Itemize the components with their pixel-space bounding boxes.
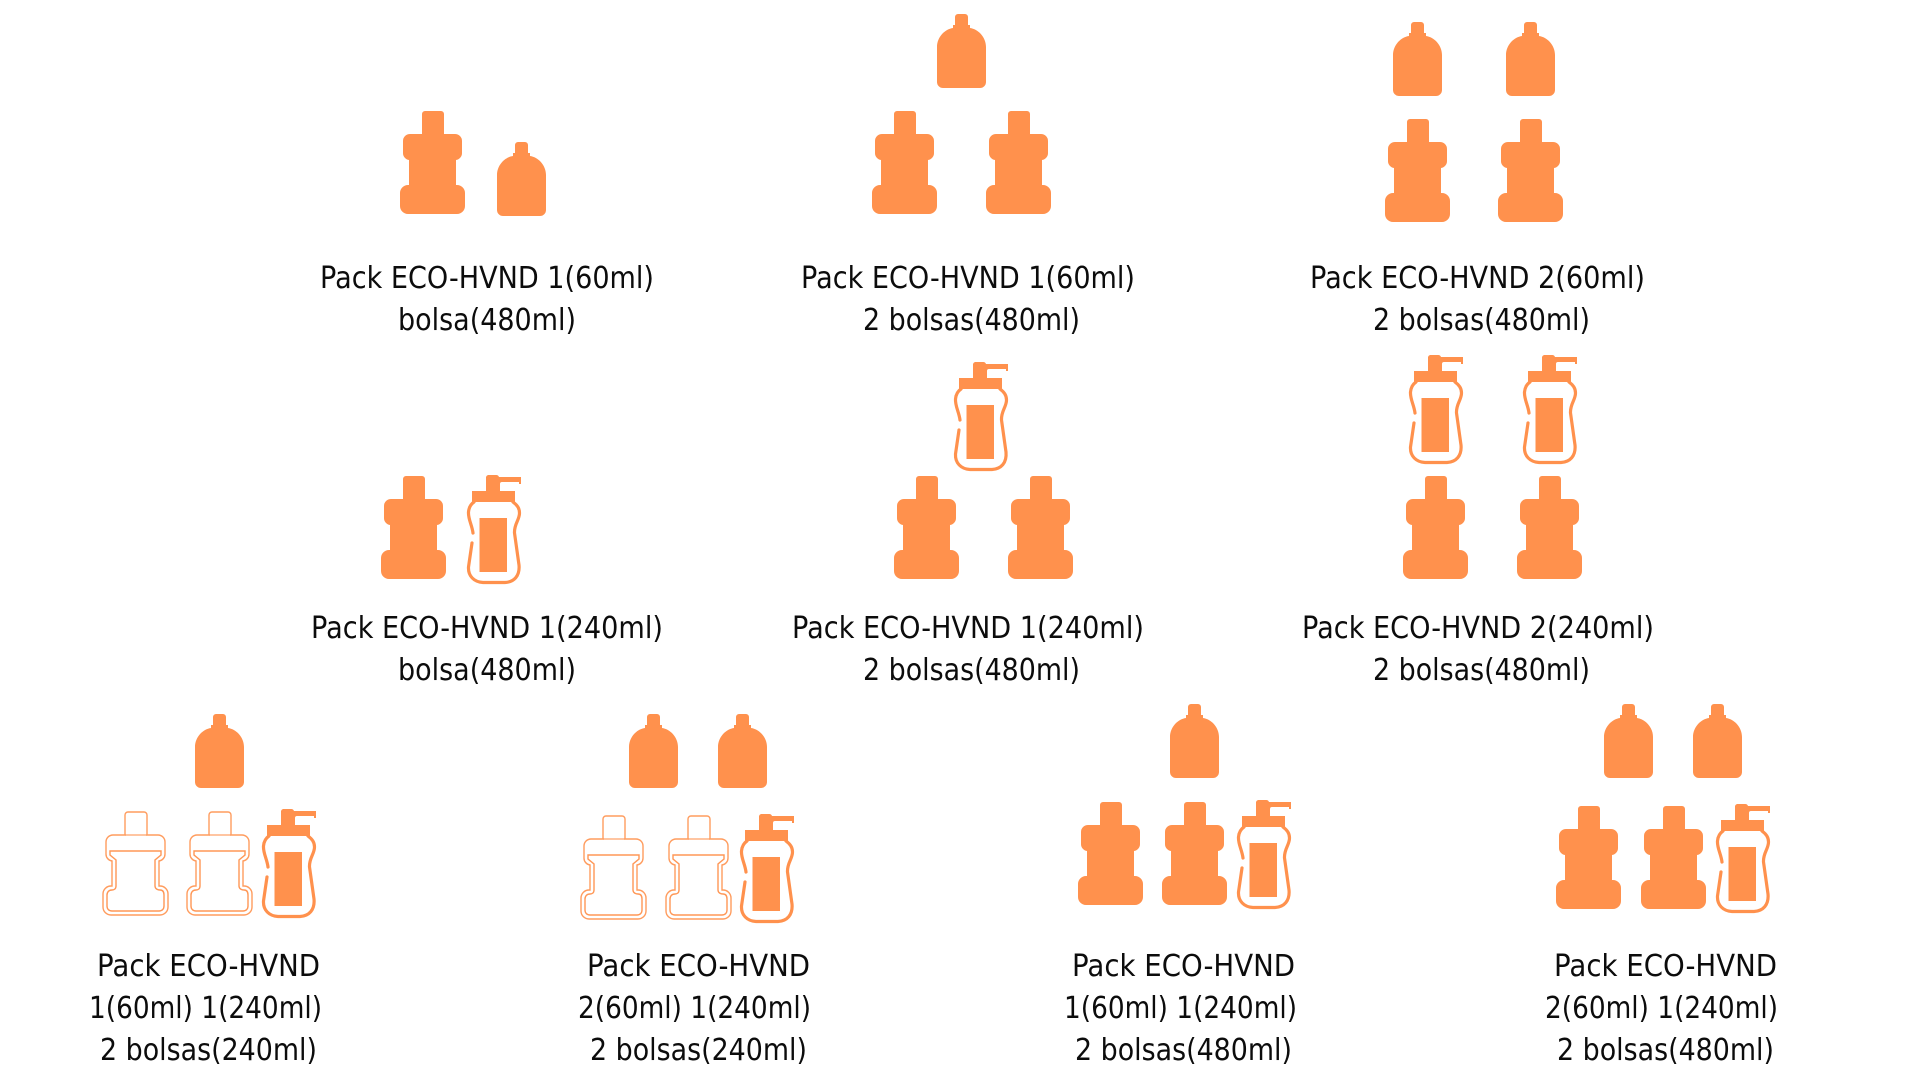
icon: jug left <box>894 476 959 579</box>
icon: pump bottle <box>955 362 1008 470</box>
icon: jug right <box>986 111 1051 214</box>
label: pack 1: bolsa(480ml) <box>398 303 576 338</box>
icon: jug <box>400 111 465 214</box>
icon: jug right <box>1641 806 1706 909</box>
icon: jug right <box>1517 476 1582 579</box>
pack 5: 1 240ml and 2 pouches <box>792 362 1154 688</box>
label: pack 9: 1(60ml) 1(240ml) <box>1064 991 1297 1026</box>
label: pack 7: Pack ECO-HVND <box>97 949 320 984</box>
label: pack 9: Pack ECO-HVND <box>1072 949 1295 984</box>
icon: pump bottle left <box>1410 355 1463 462</box>
label: pack 8: 2 bolsas(240ml) <box>590 1033 807 1068</box>
label: pack 2: 2 bolsas(480ml) <box>863 303 1080 338</box>
label: pack 4: Pack ECO-HVND 1(240ml) <box>311 611 663 646</box>
icon: jug <box>381 476 446 579</box>
icon: jug right <box>1162 802 1227 905</box>
label: pack 10: Pack ECO-HVND <box>1554 949 1777 984</box>
label: pack 5: Pack ECO-HVND 1(240ml) <box>792 611 1144 646</box>
label: pack 5: 2 bolsas(480ml) <box>863 653 1080 688</box>
label: pack 7: 2 bolsas(240ml) <box>100 1033 317 1068</box>
icon: outline jug left <box>581 816 646 919</box>
icon: pump bottle <box>1717 804 1770 912</box>
icon: small bottle left <box>1604 704 1653 778</box>
pack 1: 60ml and 480ml pouch <box>320 111 664 338</box>
icon: small bottle right <box>718 714 767 788</box>
label: pack 10: 2 bolsas(480ml) <box>1557 1033 1774 1068</box>
icon: pump bottle <box>468 475 521 582</box>
label: pack 7: 1(60ml) 1(240ml) <box>89 991 322 1026</box>
icon: pump bottle <box>1238 800 1291 908</box>
icon: small bottle right <box>1506 22 1555 96</box>
icon: pump bottle <box>263 809 316 916</box>
icon: jug right <box>1008 476 1073 579</box>
icon: outline jug right <box>187 812 252 915</box>
pack 6: 2 240ml and 2 pouches <box>1302 355 1664 688</box>
icon: pump bottle <box>741 814 794 922</box>
label: pack 8: Pack ECO-HVND <box>587 949 810 984</box>
icon: small bottle <box>1170 704 1219 778</box>
icon: jug left <box>1385 119 1450 222</box>
icon: small bottle <box>497 142 546 216</box>
icon: small bottle left <box>1393 22 1442 96</box>
icon: pump bottle right <box>1524 355 1577 462</box>
pack 4: 240ml and 480ml pouch <box>311 475 673 688</box>
icon: jug left <box>1556 806 1621 909</box>
pack 2: 1 60ml and 2 pouches <box>801 14 1145 338</box>
label: pack 4: bolsa(480ml) <box>398 653 576 688</box>
pack 3: 2 60ml and 2 pouches <box>1310 22 1655 338</box>
label: pack 3: 2 bolsas(480ml) <box>1373 303 1590 338</box>
label: pack 10: 2(60ml) 1(240ml) <box>1545 991 1778 1026</box>
icon: small bottle left <box>629 714 678 788</box>
icon: outline jug right <box>666 816 731 919</box>
icon: jug right <box>1498 119 1563 222</box>
label: pack 6: 2 bolsas(480ml) <box>1373 653 1590 688</box>
icon: jug left <box>872 111 937 214</box>
icon: jug left <box>1078 802 1143 905</box>
icon: outline jug left <box>103 812 168 915</box>
pack 9: 1 60ml, 1 240ml, 2 480ml pouches <box>1064 704 1307 1068</box>
label: pack 1: Pack ECO-HVND 1(60ml) <box>320 261 654 296</box>
label: pack 3: Pack ECO-HVND 2(60ml) <box>1310 261 1645 296</box>
label: pack 9: 2 bolsas(480ml) <box>1075 1033 1292 1068</box>
pack 7: 1 60ml, 1 240ml, 2 240ml pouches <box>89 714 332 1068</box>
icon: small bottle <box>937 14 986 88</box>
pack 10: 2 60ml, 1 240ml, 2 480ml pouches <box>1545 704 1788 1068</box>
icon: small bottle <box>195 714 244 788</box>
label: pack 8: 2(60ml) 1(240ml) <box>578 991 811 1026</box>
icon: small bottle right <box>1693 704 1742 778</box>
pack 8: 2 60ml, 1 240ml, 2 240ml pouches <box>578 714 821 1068</box>
icon: jug left <box>1403 476 1468 579</box>
label: pack 2: Pack ECO-HVND 1(60ml) <box>801 261 1135 296</box>
label: pack 6: Pack ECO-HVND 2(240ml) <box>1302 611 1654 646</box>
